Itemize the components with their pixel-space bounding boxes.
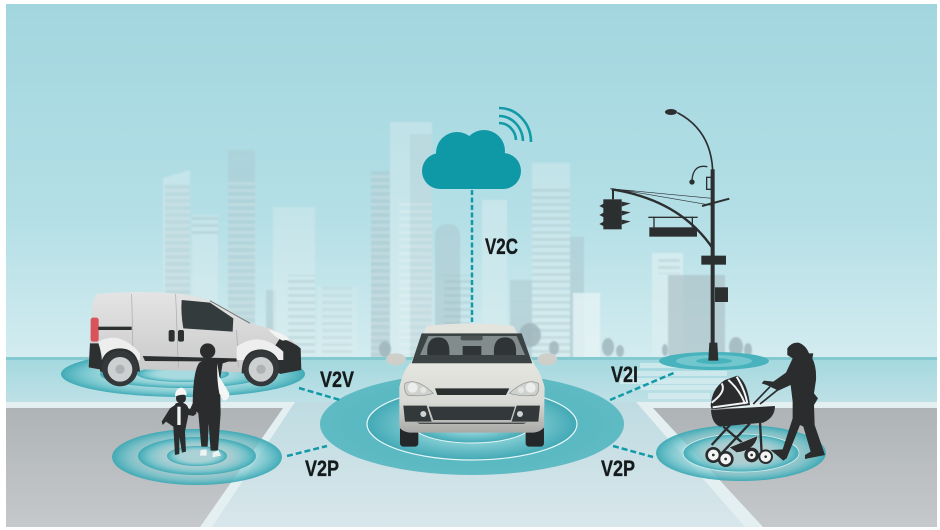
signal ripple: main car bbox=[320, 373, 624, 475]
icon: wifi signal bbox=[499, 108, 531, 142]
dashed connector: V2P right bbox=[613, 446, 653, 457]
background trees bbox=[379, 323, 752, 357]
label: V2P right: V2P bbox=[601, 456, 635, 481]
mother with stroller silhouette bbox=[705, 343, 825, 467]
road bbox=[6, 402, 937, 527]
dashed connector: V2I bbox=[610, 372, 676, 400]
main car bbox=[386, 323, 557, 447]
dashed connector: V2P left bbox=[287, 446, 327, 456]
sidewalk right bbox=[636, 402, 937, 527]
sea band bbox=[6, 358, 937, 404]
label: V2P left: V2P bbox=[305, 456, 339, 481]
city skyline bbox=[163, 122, 725, 358]
dashed connector: V2C bbox=[471, 190, 473, 322]
crosswalk bbox=[620, 363, 730, 399]
signal ripple: stroller bbox=[656, 425, 826, 481]
sky background bbox=[6, 4, 937, 360]
signal ripple: van bbox=[61, 351, 305, 397]
signal ripple: pedestrians bbox=[112, 429, 282, 485]
street lamp and traffic light bbox=[599, 109, 729, 361]
label: V2V: V2V bbox=[320, 367, 354, 392]
label: V2C: V2C bbox=[485, 234, 518, 259]
dashed connector: V2V bbox=[299, 388, 340, 400]
van bbox=[89, 292, 301, 386]
woman and child silhouette bbox=[162, 343, 229, 457]
sidewalk left bbox=[6, 402, 295, 527]
signal ripple: lamp post bbox=[659, 352, 769, 370]
label: V2I: V2I bbox=[611, 362, 638, 387]
icon: cloud bbox=[422, 130, 521, 189]
